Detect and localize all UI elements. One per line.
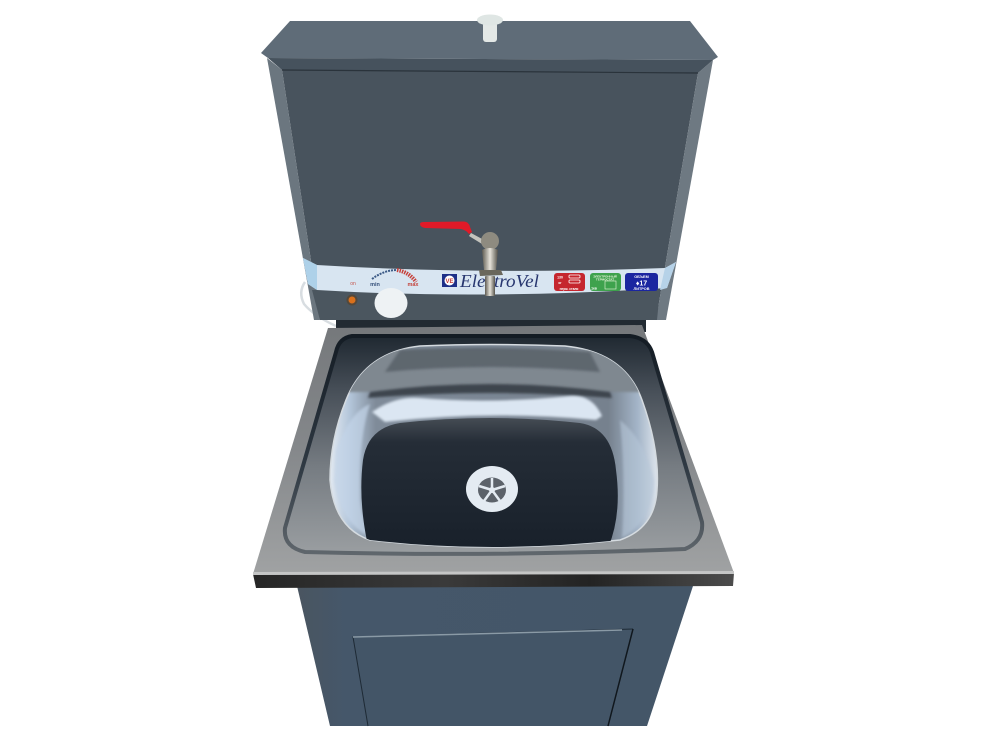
badge: volume: ЛИТРОВ bbox=[634, 287, 650, 291]
sink bbox=[253, 325, 734, 588]
tank body bbox=[282, 70, 698, 320]
badge: steel: нерж. стали bbox=[560, 287, 578, 291]
dark reflection line bbox=[368, 384, 612, 398]
label band bbox=[303, 258, 676, 295]
power cable bbox=[301, 282, 336, 326]
badge: steel: 130 bbox=[557, 276, 563, 280]
drain bbox=[466, 466, 518, 512]
temperature scale bbox=[370, 270, 419, 288]
tank right side bbox=[656, 60, 713, 320]
bowl highlight bbox=[372, 396, 602, 422]
sink top plate bbox=[253, 325, 734, 574]
lid knob bbox=[477, 14, 503, 42]
badge: volume: ОБЪЕМ bbox=[634, 275, 649, 279]
badge: volume: ♦17 bbox=[636, 280, 647, 288]
sink front edge bbox=[253, 573, 734, 588]
right wall shine bbox=[620, 420, 654, 538]
badge: heater: ЭЛЕКТРОННЫЙ bbox=[593, 274, 617, 278]
tank left side bbox=[267, 58, 320, 320]
left wall shine bbox=[334, 404, 372, 538]
logo bbox=[442, 274, 457, 287]
upper wall shade bbox=[340, 350, 650, 392]
illustration: washbasin with water heater tank bbox=[253, 14, 734, 726]
on label: on bbox=[350, 281, 356, 287]
thermostat knob bbox=[374, 288, 408, 318]
water tank bbox=[261, 14, 718, 332]
sink recess bbox=[285, 336, 702, 554]
faucet body bbox=[481, 232, 499, 250]
temperature scale: min bbox=[370, 282, 381, 288]
indicator lamp bbox=[346, 294, 358, 306]
brand name: ElectroVel bbox=[459, 271, 539, 291]
badge: heater: 1кв bbox=[591, 286, 598, 290]
temperature scale: max bbox=[407, 282, 419, 288]
cabinet: base bbox=[297, 586, 693, 726]
badge: heater bbox=[590, 273, 621, 291]
faucet bbox=[420, 222, 503, 296]
logo: VE bbox=[445, 279, 454, 285]
tank lid bbox=[261, 21, 718, 73]
tank back connector bbox=[336, 318, 646, 332]
hose nozzle bbox=[485, 276, 495, 296]
badge: steel: кг bbox=[558, 281, 562, 285]
valve handle bbox=[420, 222, 472, 234]
badge: heater: ТЕРМОСТАТ bbox=[596, 278, 614, 282]
cabinet door bbox=[353, 629, 633, 726]
bowl floor bbox=[361, 418, 618, 552]
sink bowl bbox=[330, 344, 657, 552]
badge: steel bbox=[554, 273, 585, 291]
badge: volume bbox=[625, 273, 658, 291]
